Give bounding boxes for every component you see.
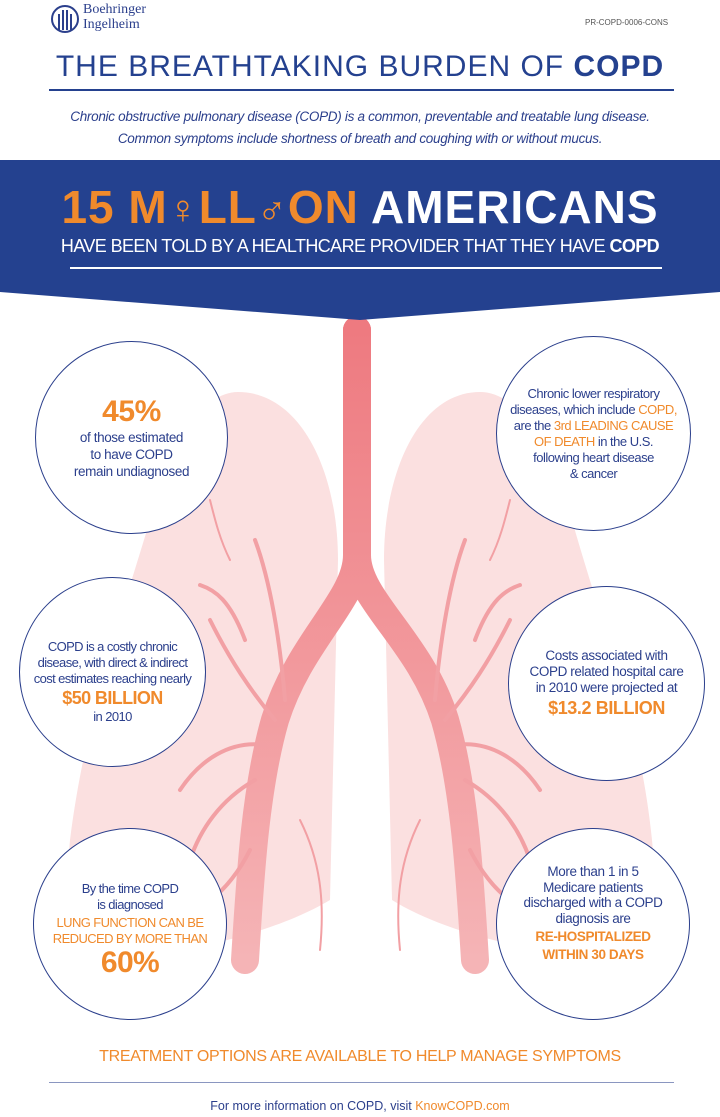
circle 4: in 2010 were projected at bbox=[536, 680, 677, 694]
code: PR-COPD-0006-CONS bbox=[585, 18, 668, 27]
treatment line: TREATMENT OPTIONS ARE AVAILABLE TO HELP MANAGE SYMPTOMS bbox=[99, 1048, 621, 1065]
circle 5: LUNG FUNCTION CAN BE bbox=[57, 915, 203, 930]
circle 5: 60% bbox=[101, 946, 159, 979]
circle 3: cost estimates reaching nearly bbox=[34, 671, 191, 686]
logo: Ingelheim bbox=[83, 17, 140, 32]
circle 4: Costs associated with bbox=[545, 648, 668, 662]
logo bbox=[51, 2, 146, 33]
circle 6 bbox=[496, 828, 690, 1020]
circle 5: REDUCED BY MORE THAN bbox=[53, 931, 207, 946]
circle 2: are the 3rd LEADING CAUSE bbox=[514, 418, 673, 432]
circle 1: of those estimated bbox=[80, 430, 183, 445]
lung left bbox=[68, 392, 338, 955]
circle 2: following heart disease bbox=[533, 450, 654, 464]
circle 3: COPD is a costly chronic bbox=[48, 639, 177, 654]
circle 2: & cancer bbox=[570, 466, 617, 480]
circle 3 bbox=[19, 577, 206, 767]
circle 6: WITHIN 30 DAYS bbox=[542, 947, 644, 962]
circle 6: More than 1 in 5 bbox=[547, 864, 639, 879]
circle 4: COPD related hospital care bbox=[530, 664, 683, 678]
circle 1: to have COPD bbox=[90, 447, 173, 462]
title: THE BREATHTAKING BURDEN OF COPD bbox=[56, 50, 664, 83]
circle 2: Chronic lower respiratory bbox=[528, 386, 660, 400]
circle 1: remain undiagnosed bbox=[74, 464, 189, 479]
circle 4 bbox=[508, 586, 705, 781]
circle 6: discharged with a COPD bbox=[523, 895, 662, 910]
circle 5: is diagnosed bbox=[97, 897, 163, 912]
banner bbox=[0, 160, 720, 320]
footer: For more information on COPD, visit KnowCOPD.com bbox=[210, 1099, 510, 1113]
text: HAVE BEEN TOLD BY A HEALTHCARE PROVIDER THAT THEY HAVE COPD bbox=[61, 236, 659, 256]
circle 6: RE-HOSPITALIZED bbox=[535, 929, 651, 944]
circle 6: Medicare patients bbox=[543, 880, 643, 894]
circle 1: 45% bbox=[102, 395, 161, 428]
circle 3: $50 BILLION bbox=[62, 688, 163, 708]
circle 5 bbox=[33, 828, 227, 1020]
circle 2: OF DEATH in the U.S. bbox=[534, 434, 653, 448]
circle 2 bbox=[496, 336, 691, 531]
circle 3: disease, with direct & indirect bbox=[38, 655, 187, 670]
circle 4: $13.2 BILLION bbox=[548, 698, 665, 718]
circle 1 bbox=[35, 341, 228, 534]
circle 2: diseases, which include COPD, bbox=[510, 402, 677, 416]
circle 3: in 2010 bbox=[93, 709, 132, 724]
intro text: Chronic obstructive pulmonary disease (COPD) is a common, preventable and treatable lung disease. bbox=[70, 109, 650, 124]
headline: 15 M♀LL♂ON AMERICANS bbox=[61, 181, 659, 233]
logo: Boehringer bbox=[83, 2, 146, 17]
intro text bbox=[70, 109, 650, 146]
lung right bbox=[384, 392, 654, 955]
bronchi bbox=[180, 318, 540, 960]
intro text: Common symptoms include shortness of breath and coughing with or without mucus. bbox=[118, 131, 602, 146]
circle 6: diagnosis are bbox=[555, 910, 631, 926]
circle 5: By the time COPD bbox=[82, 881, 178, 896]
